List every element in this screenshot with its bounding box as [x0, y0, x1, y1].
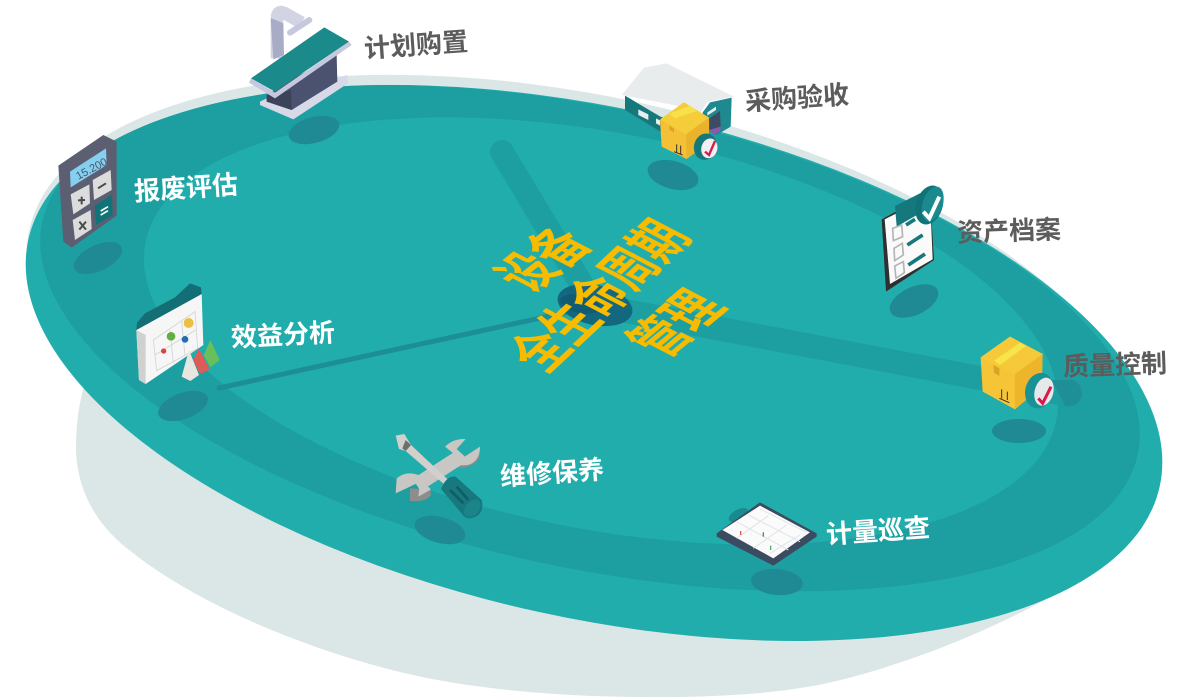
- label: 计划购置: 计划购置: [363, 26, 469, 64]
- label: 效益分析: 效益分析: [230, 317, 336, 353]
- icon: inspection clipboard: [717, 502, 817, 566]
- label: 维修保养: 维修保养: [499, 454, 605, 492]
- central title: 管理: [616, 282, 738, 366]
- platform: teal disc: [26, 85, 1162, 641]
- spokes from hub: [219, 152, 1070, 395]
- central title: 设备: [484, 220, 604, 300]
- label: 采购验收: 采购验收: [744, 79, 850, 117]
- central hub: [554, 278, 636, 332]
- central title: 全生命周期: [497, 212, 703, 380]
- label: 质量控制: 质量控制: [1063, 348, 1167, 382]
- label: 资产档案: 资产档案: [957, 214, 1061, 248]
- icon: wrench and screwdriver: [396, 434, 484, 520]
- label: 报废评估: 报废评估: [133, 169, 239, 207]
- label: 计量巡查: 计量巡查: [825, 512, 931, 550]
- icon: quality box: [981, 337, 1082, 412]
- icon: calculator: [58, 135, 117, 248]
- icon: checklist clipboard: [882, 182, 948, 292]
- shadow ellipses under icons: [69, 111, 1046, 597]
- icon: calculator: 15.200: [74, 156, 109, 182]
- icon: operating table: [249, 12, 352, 119]
- icon: chart board with pyramids: [136, 283, 220, 384]
- icon: warehouse with box: [622, 63, 734, 162]
